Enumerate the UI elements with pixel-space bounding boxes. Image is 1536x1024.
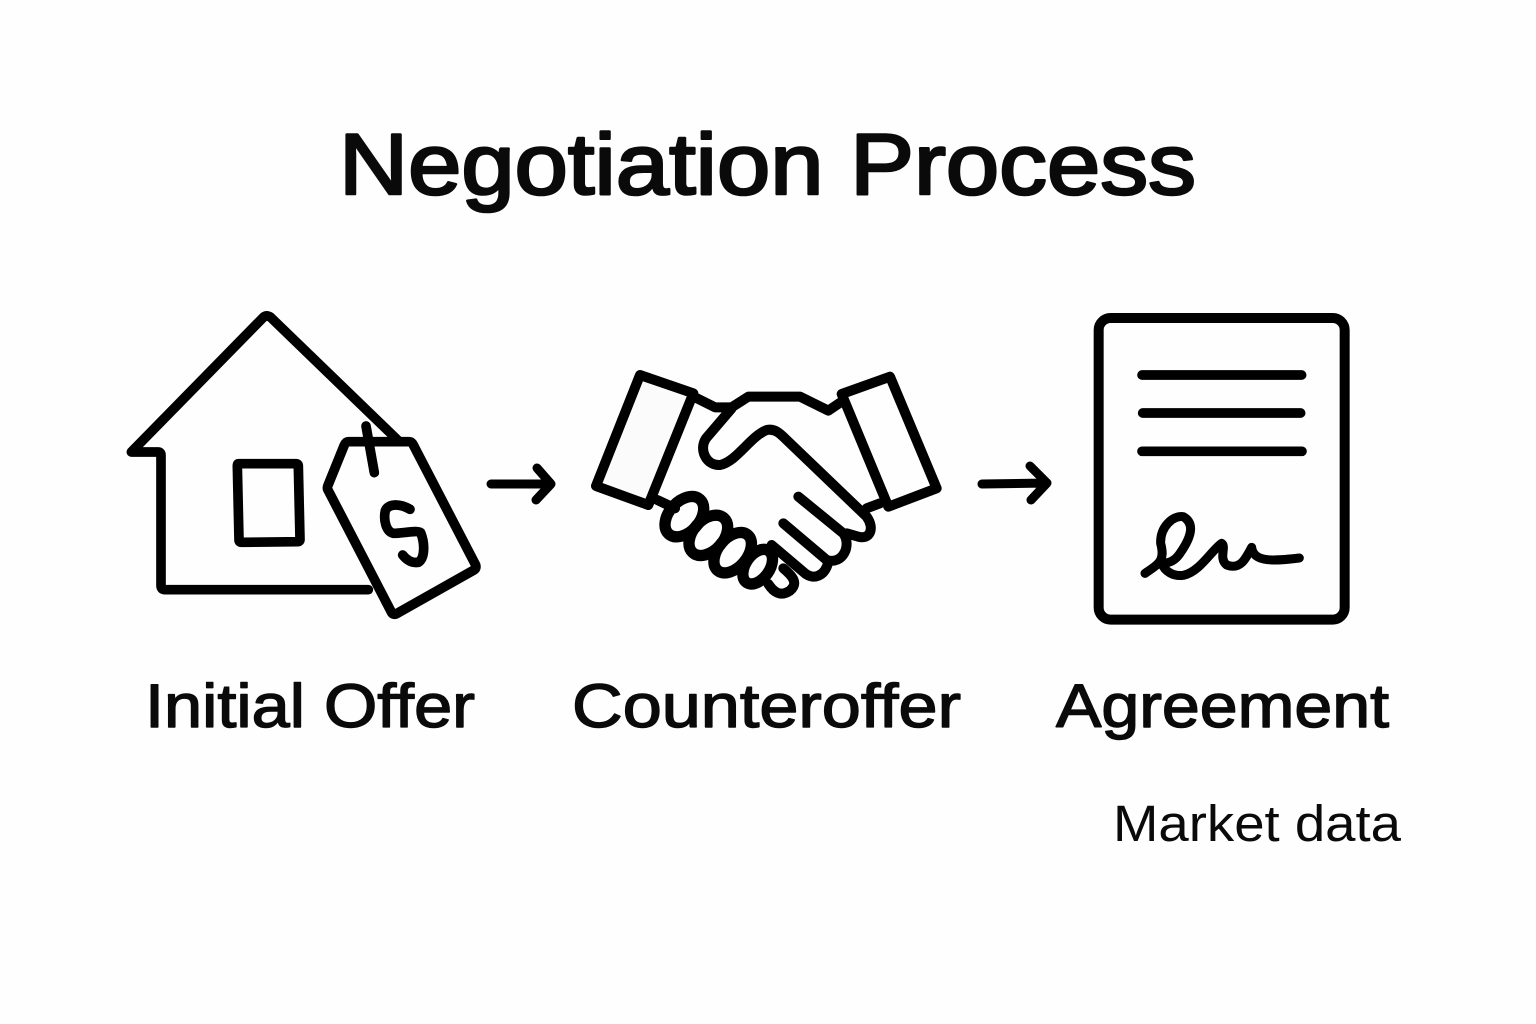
icon: handshake [596,375,937,594]
text lines [1142,375,1302,451]
clasped hands outline [657,397,880,594]
tag string [366,426,374,473]
icon: signed agreement document [1099,318,1345,620]
label: agreement: Agreement [1056,672,1389,740]
arrow: counteroffer to agreement [982,466,1047,500]
label: initial offer: Initial Offer [145,672,475,740]
price tag [327,442,476,614]
arrow: offer to counteroffer [491,468,551,500]
source note: Market data [1113,795,1402,852]
house window [237,464,300,542]
label: counteroffer: Counteroffer [572,672,961,740]
title: Negotiation Process [339,117,1196,213]
fingers [657,489,779,589]
right cuff [842,377,937,507]
icon: house with price tag [131,316,476,614]
dollar sign [385,505,424,563]
signature [1145,517,1299,576]
house outline [131,316,399,590]
left cuff [596,375,693,505]
document page [1099,318,1345,620]
